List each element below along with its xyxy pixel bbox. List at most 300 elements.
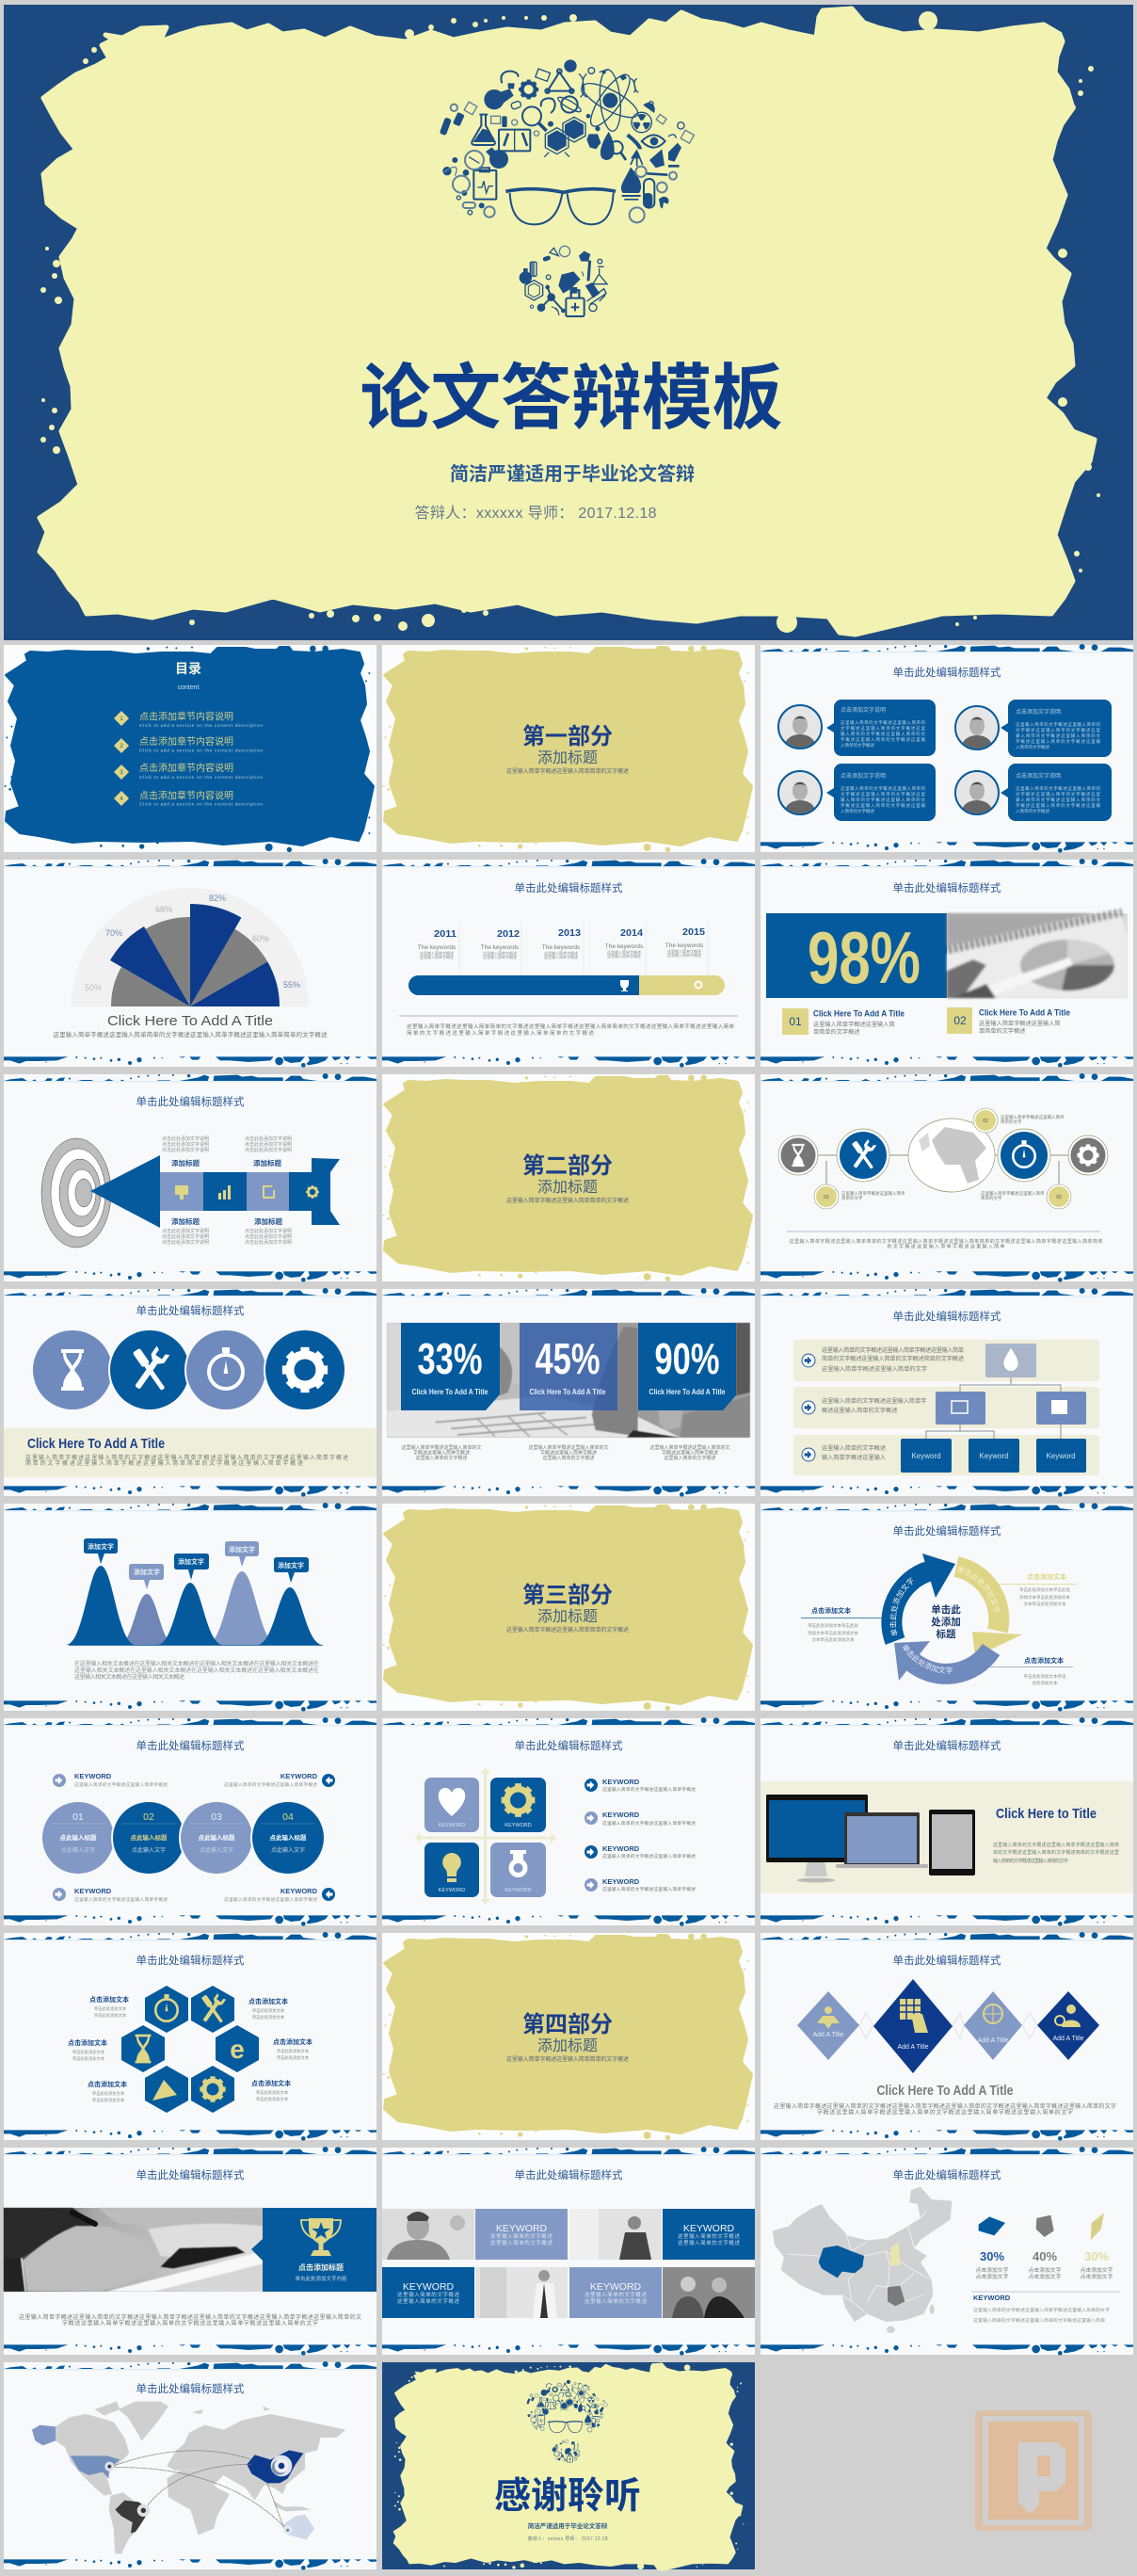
keyword list: KEYWORD [602, 1877, 640, 1886]
slide: hexagon ring [4, 1932, 376, 2141]
person card 3: 入简单的文字概述 [841, 808, 874, 814]
slide: 98 percent [761, 859, 1133, 1068]
diamond 2 [873, 1979, 953, 2073]
keyword list [585, 1778, 696, 1892]
icon: science hair and glasses [440, 59, 694, 316]
arrow small notes: 点击此处添加文字说明 [162, 1228, 209, 1234]
stat panel 45%: 45% [535, 1334, 601, 1383]
slide: section 3: 这里输入简单字概述这里输入简单简单的文字概述 [506, 1626, 629, 1634]
bands [793, 1340, 1099, 1475]
stat panel 45%: Click Here To Add A Title [529, 1387, 606, 1396]
slide: devices [761, 1717, 1133, 1926]
row text: 概述这里输入简单的文字概述 [822, 1407, 897, 1414]
toc item 1: 点击添加章节内容说明 [139, 710, 233, 723]
slide: china map: 这里输入简单的文字概述这里输入简单的文字概述这里输入简单 [973, 2317, 1105, 2324]
right top note: 单击此处添加文本单击此处 [1019, 1586, 1070, 1593]
diamond 4: Add A Title [1052, 2036, 1084, 2042]
small node 02: 02 [983, 1119, 988, 1124]
right top note: 添加文本单击此处添加文本 [1019, 1594, 1070, 1601]
keyword tile 4: KEYWORD [590, 2281, 642, 2293]
watermark logo [975, 2410, 1092, 2531]
person card 2: 输入简单的文字概述这里输入简单的文 [1016, 733, 1101, 739]
year columns: 这里输入简单字概述 [420, 954, 454, 959]
cycle diagram: 单击此处添加文字 [889, 1578, 913, 1636]
arrow small notes: 点击此处添加文字说明 [162, 1135, 209, 1142]
callouts: 添加文字 [134, 1568, 160, 1576]
fan chart: 70% [105, 928, 122, 938]
slide: 01-04 circles: 单击此处编辑标题样式 [136, 1739, 245, 1752]
tree nodes: Keyword [911, 1452, 941, 1460]
slide: four people: 单击此处编辑标题样式 [892, 666, 1001, 679]
toc item 1 [114, 710, 263, 729]
keyword top right: KEYWORD [280, 1772, 318, 1780]
feature 01 [782, 1008, 905, 1036]
row text: 这里输入简单的文字概述这里输入简单字 [822, 1397, 926, 1405]
step circles: 点此输入标题 [60, 1833, 97, 1842]
person card 2: 字概述这里输入简单的文字概述这里输 [1016, 738, 1101, 745]
year columns: 这里输入简单字概述 [420, 950, 454, 956]
arrow labels [171, 1158, 282, 1226]
percent stats [980, 2249, 1109, 2263]
cross arrows [415, 1768, 556, 1905]
slide: devices: 这里输入简单的文字概述这里输入简单字概述这里输入简单 [993, 1842, 1119, 1848]
hero slide: thesis defense cover [4, 5, 1133, 640]
progress bar [408, 975, 725, 995]
paragraph: 这里输入相关文本概述在这里输入相关文本概述 [74, 1673, 184, 1681]
slide: globe chain: 这里输入简单字概述这里输入简单简单的文字概述这里输入简单字概述这里输入简单简单的文字概述这里输入简单字概述这里输入简单简单 [789, 1238, 1103, 1245]
person card 2: 入简单的文字概述 [1016, 744, 1049, 750]
row text: 这里输入简单的文字概述 [822, 1444, 886, 1452]
hero title: 论文答辩模板 [360, 359, 783, 439]
hex notes: 单击此处添加文本 [94, 2012, 127, 2019]
step circles: 点此输入标题 [130, 1833, 168, 1842]
feature 01: 这里输入简单字概述这里输入简 [813, 1021, 895, 1028]
stat captions: 这里输入简单字概述这里输入简单的文 [649, 1444, 730, 1451]
slide: four circle icons [4, 1288, 376, 1497]
slide: timeline: 单击此处编辑标题样式 [514, 881, 623, 894]
slide: section 3: 添加标题 [537, 1608, 598, 1625]
keyword bottom right [224, 1887, 335, 1903]
photo: two businessmen [663, 2267, 755, 2318]
slide: diamonds: 这里输入简单字概述这里输入简单的文字概述这里输入简单字概述这里输入简单的文字概述这里输入简单字概述这里输入简单的文字 [774, 2102, 1116, 2110]
arrow small notes: 点击此处添加文字说明 [162, 1233, 209, 1240]
keyword tile 1: 这里输入简单的文字概述 [490, 2239, 552, 2246]
small node 02 [973, 1108, 1065, 1133]
step circles: 03 [211, 1811, 222, 1823]
icon: small hair [526, 2380, 608, 2462]
row text: 这里输入简单字概述这里输入简单的文字 [822, 1365, 927, 1373]
step circles [42, 1800, 326, 1876]
year columns: 这里输入简单字概述 [544, 954, 578, 959]
person card 1: 字概述这里输入简单的文字概述这里输 [841, 736, 926, 743]
slide: section 1: 这里输入简单字概述这里输入简单简单的文字概述 [506, 767, 629, 775]
person card 3: 文字概述这里输入简单的文字概述这里 [841, 791, 926, 797]
caption band: 简单的文字概述这里输入简单字概述这里输入简单简单的文字概述这里输入简单字概述 [25, 1459, 303, 1467]
year columns: 这里输入简单字概述 [607, 949, 641, 955]
keyword list: 这里输入简单的文字概述这里输入简单字概述 [602, 1786, 696, 1793]
person card 1 [778, 700, 936, 756]
left note [801, 1606, 885, 1643]
arrow small notes: 点击此处添加文字说明 [245, 1239, 292, 1246]
slide: timeline: 简单的文字概述这里输入简单字概述这里输入简单简单的文字概述 [407, 1029, 594, 1037]
slide: china map [761, 2147, 1133, 2356]
step circles: 点此输入文字 [200, 1846, 233, 1854]
slide: target arrow [4, 1073, 376, 1282]
keyword list: 这里输入简单的文字概述这里输入简单字概述 [602, 1820, 696, 1827]
feature 02: 单简单的文字概述 [979, 1027, 1026, 1035]
year columns: 2014 [620, 928, 643, 939]
photo: hand writing [4, 2208, 263, 2292]
stat captions: 这里输入简单的文字概述 [415, 1455, 468, 1461]
percent stats: 30% [1084, 2249, 1109, 2263]
diamond 3: Add A Title [977, 2037, 1009, 2044]
person card 3: 输入简单的文字概述这里输入简单的文 [841, 797, 926, 803]
slide: radial fan chart: Click Here To Add A Title [107, 1013, 273, 1029]
toc item 2 [114, 735, 263, 753]
row text: 输入简单字概述这里输入 [822, 1454, 886, 1461]
slide: devices: 输入简单的文字概述这里输入简单的文字 [993, 1858, 1068, 1864]
person card 4: 这里输入简单的文字概述这里输入简单的 [1016, 785, 1101, 792]
toc item 3: 3 [120, 770, 123, 776]
slide: four squares [382, 1717, 755, 1926]
step circles: 02 [143, 1811, 154, 1823]
year columns: 2011 [434, 929, 456, 940]
small node 02: 简单的文字 [1001, 1119, 1022, 1125]
year columns: 这里输入简单字概述 [667, 948, 701, 954]
caption band: Click Here To Add A Title [27, 1436, 165, 1452]
year columns: 这里输入简单字概述 [483, 950, 517, 956]
connectors [817, 1121, 1069, 1184]
year columns: The keywords [418, 944, 456, 951]
toc item 1: 1 [120, 716, 123, 722]
person card 4: 字概述这里输入简单的文字概述这里输 [1016, 802, 1101, 809]
slide: china map: 点击添加文字 [976, 2266, 1009, 2274]
slide: radial fan chart: 这里输入简单字概述这里输入简单简单的文字概述这里输入简单字概述这里输入简单简单的文字概述 [53, 1030, 328, 1038]
photo: man presenting [475, 2267, 568, 2318]
paragraph: 在这里输入相关文本概述在这里输入相关文本概述在这里输入相关文本概述在这里输入相关文本概述在 [74, 1660, 319, 1667]
keyword bottom left: 这里输入简单的文字概述这里输入简单字概述 [74, 1896, 168, 1903]
stat captions: 这里输入简单的文字概述 [664, 1455, 716, 1461]
tree connectors [926, 1377, 1061, 1439]
tree nodes: Keyword [979, 1452, 1009, 1460]
keyword list: KEYWORD [602, 1811, 640, 1819]
keyword tile 3: KEYWORD [403, 2281, 455, 2293]
slide: section 4: 添加标题 [537, 2037, 598, 2054]
slide: devices: Click Here to Title [996, 1806, 1097, 1822]
arrow small notes: 点击此处添加文字说明 [245, 1228, 292, 1234]
icon squares: KEYWORD [439, 1888, 465, 1893]
keyword bottom left [53, 1887, 168, 1903]
stat panel 33% [401, 1323, 500, 1410]
person card 4: 点击添加文字说明 [1016, 772, 1061, 780]
row text: 简单的文字概述这里输入简单的文字概述简单的文字概述 [822, 1355, 964, 1362]
keyword tile 2: KEYWORD [683, 2223, 735, 2234]
slide: china map: 点击添加文字 [1081, 2266, 1113, 2274]
photo: man in office [569, 2209, 662, 2260]
slide: section 4: 这里输入简单字概述这里输入简单简单的文字概述 [506, 2055, 629, 2063]
slide: world map: 单击此处编辑标题样式 [136, 2382, 245, 2395]
slide: china map: 单击此处编辑标题样式 [892, 2168, 1001, 2182]
slide: devices: 单击此处编辑标题样式 [892, 1739, 1001, 1752]
hex notes: 单击此处添加文本 [277, 2048, 310, 2054]
toc item 2: Click to add a section on the content description [139, 748, 263, 753]
year columns: 这里输入简单字概述 [667, 952, 701, 958]
fan chart: 50% [85, 983, 102, 992]
year columns: 这里输入简单字概述 [607, 953, 641, 958]
person card 1: 入简单的文字概述 [841, 742, 874, 749]
cycle diagram: 标题 [936, 1628, 956, 1640]
slide: china map: 点击添加文字 [1029, 2266, 1062, 2274]
slide: four squares: 单击此处编辑标题样式 [514, 1739, 623, 1752]
keyword list: KEYWORD [602, 1778, 640, 1786]
keyword top right: 这里输入简单的文字概述这里输入简单字概述 [224, 1781, 317, 1788]
hex notes: 单击此处添加文本 [252, 2007, 285, 2014]
feature 02: Click Here To Add A Title [979, 1007, 1070, 1019]
hex notes: 单击此处添加文本 [277, 2054, 310, 2061]
toc item 4 [114, 789, 263, 808]
toc item 3: Click to add a section on the content description [139, 775, 263, 781]
slide: diamonds: 单击此处编辑标题样式 [892, 1954, 1001, 1967]
hex notes: 单击此处添加文本 [94, 2005, 127, 2012]
slide: china map: 这里输入简单的文字概述这里输入简单字概述这里输入简单的文字 [973, 2307, 1110, 2313]
slide: section 1: 添加标题 [537, 749, 598, 766]
tree nodes: Keyword [1046, 1452, 1076, 1460]
mini region icons [979, 2213, 1104, 2240]
person card 4: 文字概述这里输入简单的文字概述这里 [1016, 791, 1101, 797]
keyword tile 2: 这里输入简单的文字概述 [678, 2239, 740, 2246]
slide: pen photo: 这里输入简单字概述这里输入简单的文字概述这里输入简单字概述这里输入简单的文字概述这里输入简单字概述这里输入简单的文 [19, 2313, 361, 2321]
callouts: 添加文字 [229, 1545, 255, 1554]
feature 02: 02 [953, 1014, 967, 1027]
small node 03: 这里输入简单字概述这里输入简单 [981, 1190, 1045, 1197]
step circles: 点此输入文字 [132, 1846, 166, 1854]
arrow labels: 添加标题 [253, 1158, 281, 1167]
stat captions [401, 1444, 730, 1461]
keyword tile 2: 这里输入简单的文字概述 [678, 2232, 740, 2240]
keyword tile 3 [382, 2267, 474, 2318]
slide: mountains chart [4, 1503, 376, 1712]
hex notes: 单击此处添加文本 [256, 2089, 289, 2096]
arrow bullets [802, 1354, 815, 1461]
slide: table of contents: content [178, 684, 200, 691]
toc item 3: 点击添加章节内容说明 [139, 762, 233, 774]
step circles: 01 [72, 1811, 84, 1823]
slide: cycle arrows [761, 1503, 1133, 1712]
keyword bottom left: KEYWORD [74, 1887, 112, 1895]
diamond 1 [797, 1991, 859, 2060]
slide: section 3: 第三部分 [522, 1583, 613, 1608]
feature 02: 这里输入简单字概述这里输入简 [979, 1020, 1061, 1027]
small node 03: 简单的文字 [981, 1195, 1002, 1201]
feature 01: 单简单的文字概述 [813, 1028, 860, 1036]
year columns: The keywords [605, 943, 644, 950]
hex labels: 点击添加文本 [68, 2038, 107, 2047]
left note: 单击此处添加文本单击此处 [808, 1622, 858, 1629]
toc item 4: 点击添加章节内容说明 [139, 789, 233, 802]
slide: diamonds [761, 1932, 1133, 2141]
icon squares: KEYWORD [504, 1888, 532, 1893]
toc item 1: Click to add a section on the content description [139, 723, 263, 729]
callout panel with trophy: 点击添加标题 [298, 2262, 344, 2272]
person card 1: 点击添加文字说明 [841, 706, 886, 714]
stat panel: 98% [808, 916, 921, 999]
photo: keyboard [387, 1323, 750, 1438]
cycle diagram: 处添加 [931, 1616, 961, 1628]
arrow small notes: 点击此处添加文字说明 [162, 1239, 209, 1246]
slide: pen photo [4, 2147, 376, 2356]
row text: 这里输入简单的文字概述这里输入简单字概述这里输入简单 [822, 1346, 964, 1354]
stat captions: 字概述这里输入简单字概述 [540, 1450, 597, 1456]
arrow small notes: 点击此处添加文字说明 [245, 1147, 292, 1153]
person card 1: 输入简单的文字概述这里输入简单的文 [841, 731, 926, 737]
stat captions: 字概述这里输入简单字概述 [662, 1450, 718, 1456]
slide: world map [4, 2361, 376, 2570]
diamond 4 [1037, 1991, 1099, 2060]
feature 01: 01 [789, 1015, 802, 1028]
fan chart: 82% [209, 894, 226, 903]
slide: pen photo: 单击此处编辑标题样式 [136, 2168, 245, 2182]
person card 3: 这里输入简单的文字概述这里输入简单的 [841, 785, 926, 792]
slide: table of contents: 目录 [175, 661, 201, 676]
toc item 4: Click to add a section on the content description [139, 802, 263, 808]
right top note: 文本单击此处添加文本 [1024, 1601, 1066, 1607]
arrow [90, 1155, 340, 1228]
icon squares: KEYWORD [504, 1823, 532, 1828]
percent stats: 30% [980, 2249, 1004, 2263]
small node 03: 03 [1056, 1195, 1062, 1200]
keyword tile 4: 这里输入简单的文字概述 [585, 2297, 647, 2305]
bell chart [66, 1566, 323, 1646]
arrow small notes: 点击此处添加文字说明 [245, 1233, 292, 1240]
hex labels: 点击添加文本 [248, 1997, 288, 2005]
slide: section 2: 第二部分 [522, 1153, 613, 1179]
slide: diamonds: 字概述这里输入简单字概述这里输入简单的文字概述这里输入简单字概述这里输入简单的文字 [817, 2109, 1073, 2117]
person card 1: 这里输入简单的文字概述这里输入简单的 [841, 719, 926, 726]
slide: cycle arrows: 单击此处编辑标题样式 [892, 1524, 1001, 1538]
slide: section 4 [382, 1933, 755, 2140]
year columns: The keywords [542, 944, 581, 951]
person card 4: 输入简单的文字概述这里输入简单的文 [1016, 797, 1101, 803]
person card 4: 入简单的文字概述 [1016, 808, 1049, 814]
icon squares: KEYWORD [439, 1823, 465, 1828]
keyword bottom right: 这里输入简单的文字概述这里输入简单字概述 [224, 1896, 317, 1903]
row text [822, 1346, 964, 1461]
cycle diagram: 单击此处添加文字 [902, 1644, 953, 1674]
stat captions: 这里输入简单字概述这里输入简单的文 [528, 1444, 609, 1451]
slide: section 2: 添加标题 [537, 1179, 598, 1196]
feature 02 [947, 1007, 1070, 1035]
slide: 98 percent: 单击此处编辑标题样式 [892, 881, 1001, 894]
step circles: 点此输入文字 [61, 1846, 95, 1854]
keyword top left [53, 1772, 168, 1788]
fan chart [72, 888, 309, 1006]
step circles: 04 [282, 1811, 294, 1823]
diamond 1: Add A Title [812, 2032, 844, 2038]
callouts: 添加文字 [178, 1557, 204, 1566]
left note: 点击添加文本 [811, 1606, 851, 1615]
person card 2: 这里输入简单的文字概述这里输入简单的 [1016, 721, 1101, 728]
year columns: 2013 [558, 928, 581, 939]
keyword tile 1: KEYWORD [496, 2223, 548, 2234]
toc item 4: 4 [120, 797, 123, 802]
slide: four circle icons: 单击此处编辑标题样式 [136, 1304, 245, 1317]
small node 01 [814, 1184, 905, 1209]
toc item 2: 点击添加章节内容说明 [139, 735, 233, 748]
hex labels: 点击添加文本 [251, 2079, 291, 2087]
hex notes: 单击此处添加文本 [252, 2014, 285, 2021]
person card 3: 字概述这里输入简单的文字概述这里输 [841, 802, 926, 809]
tree nodes [901, 1344, 1086, 1473]
paragraph: 这里输入相关文本概述在这里输入相关文本概述在这里输入相关文本概述在这里输入相关文本概述在 [74, 1666, 319, 1674]
person card 3: 点击添加文字说明 [841, 772, 886, 780]
stat panel 45% [520, 1323, 617, 1410]
slide: section 1: 第一部分 [522, 724, 613, 749]
hex notes: 单击此处添加文本 [72, 2049, 105, 2055]
callouts: 添加文字 [278, 1561, 304, 1570]
person card 1: 文字概述这里输入简单的文字概述这里 [841, 725, 926, 732]
target [41, 1138, 111, 1248]
map markers [104, 2455, 292, 2535]
keyword tile 1: 这里输入简单的文字概述 [490, 2232, 552, 2240]
callouts: 添加文字 [88, 1542, 114, 1551]
slide: 01-04 circles [4, 1717, 376, 1926]
keyword top left: 这里输入简单的文字概述这里输入简单字概述 [74, 1781, 168, 1788]
year columns: The keywords [665, 942, 704, 949]
stat captions: 字概述这里输入简单字概述 [413, 1450, 470, 1456]
stat panel 90% [638, 1323, 736, 1410]
small node 03 [981, 1184, 1071, 1209]
keyword list: 这里输入简单的文字概述这里输入简单字概述 [602, 1853, 696, 1860]
icon: gear node [1068, 1135, 1108, 1175]
circle icon row [33, 1328, 346, 1411]
icon: tools node [837, 1129, 889, 1182]
hex labels: 点击添加文本 [88, 2080, 127, 2088]
stat captions: 这里输入简单的文字概述 [542, 1455, 595, 1461]
slide: timeline [382, 859, 755, 1068]
person card 2 [955, 700, 1112, 757]
keyword bottom right: KEYWORD [280, 1887, 318, 1895]
fan chart: 68% [155, 905, 172, 914]
toc item 3 [114, 762, 263, 781]
small node 01: 01 [824, 1195, 829, 1200]
keyword top right [224, 1772, 335, 1788]
left note: 文本单击此处添加文本 [811, 1636, 855, 1643]
slide: thank you: 简洁严谨适用于毕业论文答辩 [528, 2521, 608, 2530]
world map [32, 2402, 345, 2553]
slide: devices: 单的文字概述这里输入简单的文字概述简单的文字概述这里 [993, 1849, 1119, 1856]
slide: section 1 [382, 645, 755, 852]
arrow small notes: 点击此处添加文字说明 [245, 1141, 292, 1148]
slide: hexagon ring: 单击此处编辑标题样式 [136, 1954, 245, 1967]
slide: china map: 点击添加文字 [976, 2273, 1009, 2280]
slide: section 2 [382, 1074, 755, 1281]
person card 4 [955, 764, 1112, 821]
hero subtitle: 简洁严谨适用于毕业论文答辩 [450, 462, 695, 485]
caption band [4, 1428, 376, 1477]
step circles: 点此输入标题 [198, 1833, 235, 1842]
hex labels: 点击添加文本 [273, 2037, 312, 2046]
year columns: The keywords [481, 944, 520, 951]
stat panel 33%: Click Here To Add A Title [412, 1387, 488, 1396]
cycle diagram: 单击此处添加文字 [956, 1566, 1000, 1613]
feature 01: Click Here To Add A Title [813, 1009, 905, 1019]
year columns: 这里输入简单字概述 [544, 950, 578, 956]
arrow small notes [162, 1135, 292, 1246]
arrow small notes: 点击此处添加文字说明 [245, 1135, 292, 1142]
slide: section 2: 这里输入简单字概述这里输入简单简单的文字概述 [506, 1197, 629, 1204]
callout panel with trophy: 单击此处添加文字内容 [295, 2275, 347, 2282]
slide: keyword grid: 单击此处编辑标题样式 [514, 2168, 623, 2182]
